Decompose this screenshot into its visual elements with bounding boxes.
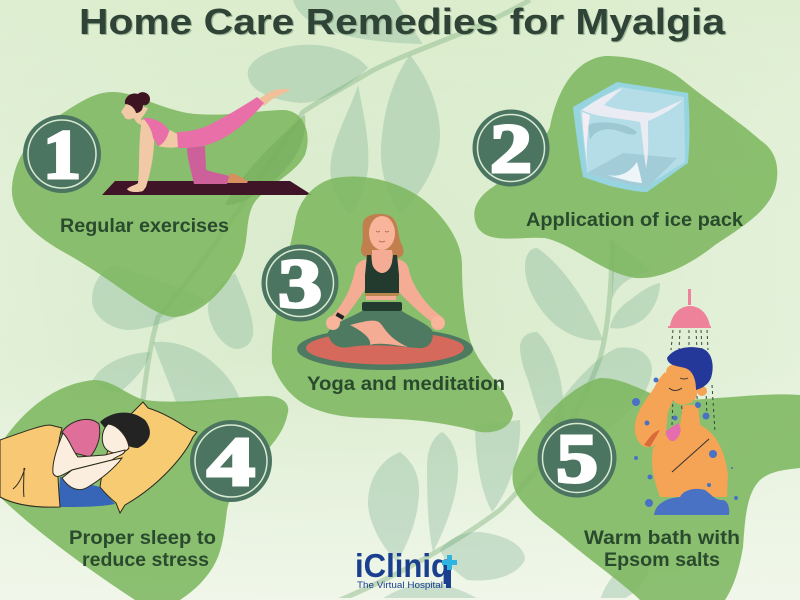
number badge 5: 5 <box>556 421 598 498</box>
blue shirt <box>58 477 115 507</box>
face <box>664 363 698 405</box>
blob 3 <box>272 177 513 432</box>
panel: regular exercises <box>12 89 312 317</box>
panel: yoga and meditation <box>262 177 513 432</box>
icon: woman exercising <box>121 89 291 192</box>
title: Home Care Remedies for Myalgia <box>79 1 726 42</box>
icon: man in shower <box>632 289 738 515</box>
icon: meditating woman <box>297 214 473 370</box>
blob 1 <box>12 92 308 317</box>
panel: proper sleep <box>0 380 288 600</box>
number badge 3: 3 <box>278 246 322 323</box>
blanket <box>0 425 62 507</box>
label: proper sleep line 2: reduce stress <box>82 550 209 571</box>
sponge <box>666 423 681 441</box>
logo: iCliniq: The Virtual Hospital <box>357 580 443 591</box>
leaf overlay 1 <box>225 115 305 205</box>
hair <box>667 347 713 390</box>
label: warm bath line 2: Epsom salts <box>604 550 720 571</box>
raised arm <box>635 372 674 447</box>
number badge 3 <box>262 244 338 323</box>
icon: logo plus <box>442 555 457 570</box>
number badge 1: 1 <box>43 117 81 194</box>
label: proper sleep line 1: Proper sleep to <box>69 528 216 549</box>
blob 5 <box>512 378 800 600</box>
pink sweater <box>62 419 100 457</box>
pillow <box>100 402 197 513</box>
shower head <box>688 289 691 305</box>
yoga mat <box>102 181 312 195</box>
arms <box>53 433 125 476</box>
hair <box>100 413 150 448</box>
number badge 1 <box>23 115 101 194</box>
panel: application of ice pack <box>472 56 777 278</box>
blob 4 <box>0 380 288 600</box>
label: regular exercises: Regular exercises <box>60 216 229 237</box>
label: yoga and meditation: Yoga and meditation <box>307 374 505 395</box>
icon: sleeping person <box>0 402 197 513</box>
number badge 5 <box>538 418 616 498</box>
panel: warm bath <box>512 289 800 600</box>
label: application of ice pack: Application of ice pack <box>526 210 743 231</box>
logo: iCliniq: iCliniq <box>355 547 450 584</box>
number badge 2: 2 <box>490 111 532 188</box>
blob 2 <box>474 56 777 278</box>
title: Home Care Remedies for Myalgia <box>80 2 727 43</box>
number badge 4 <box>190 420 272 502</box>
icon: ice cube <box>573 82 690 192</box>
torso <box>652 405 728 497</box>
face <box>102 424 129 453</box>
number badge 2 <box>472 110 550 188</box>
number badge 4: 4 <box>207 424 255 501</box>
mat <box>297 328 473 370</box>
label: warm bath line 1: Warm bath with <box>584 528 740 549</box>
foam <box>654 489 729 515</box>
